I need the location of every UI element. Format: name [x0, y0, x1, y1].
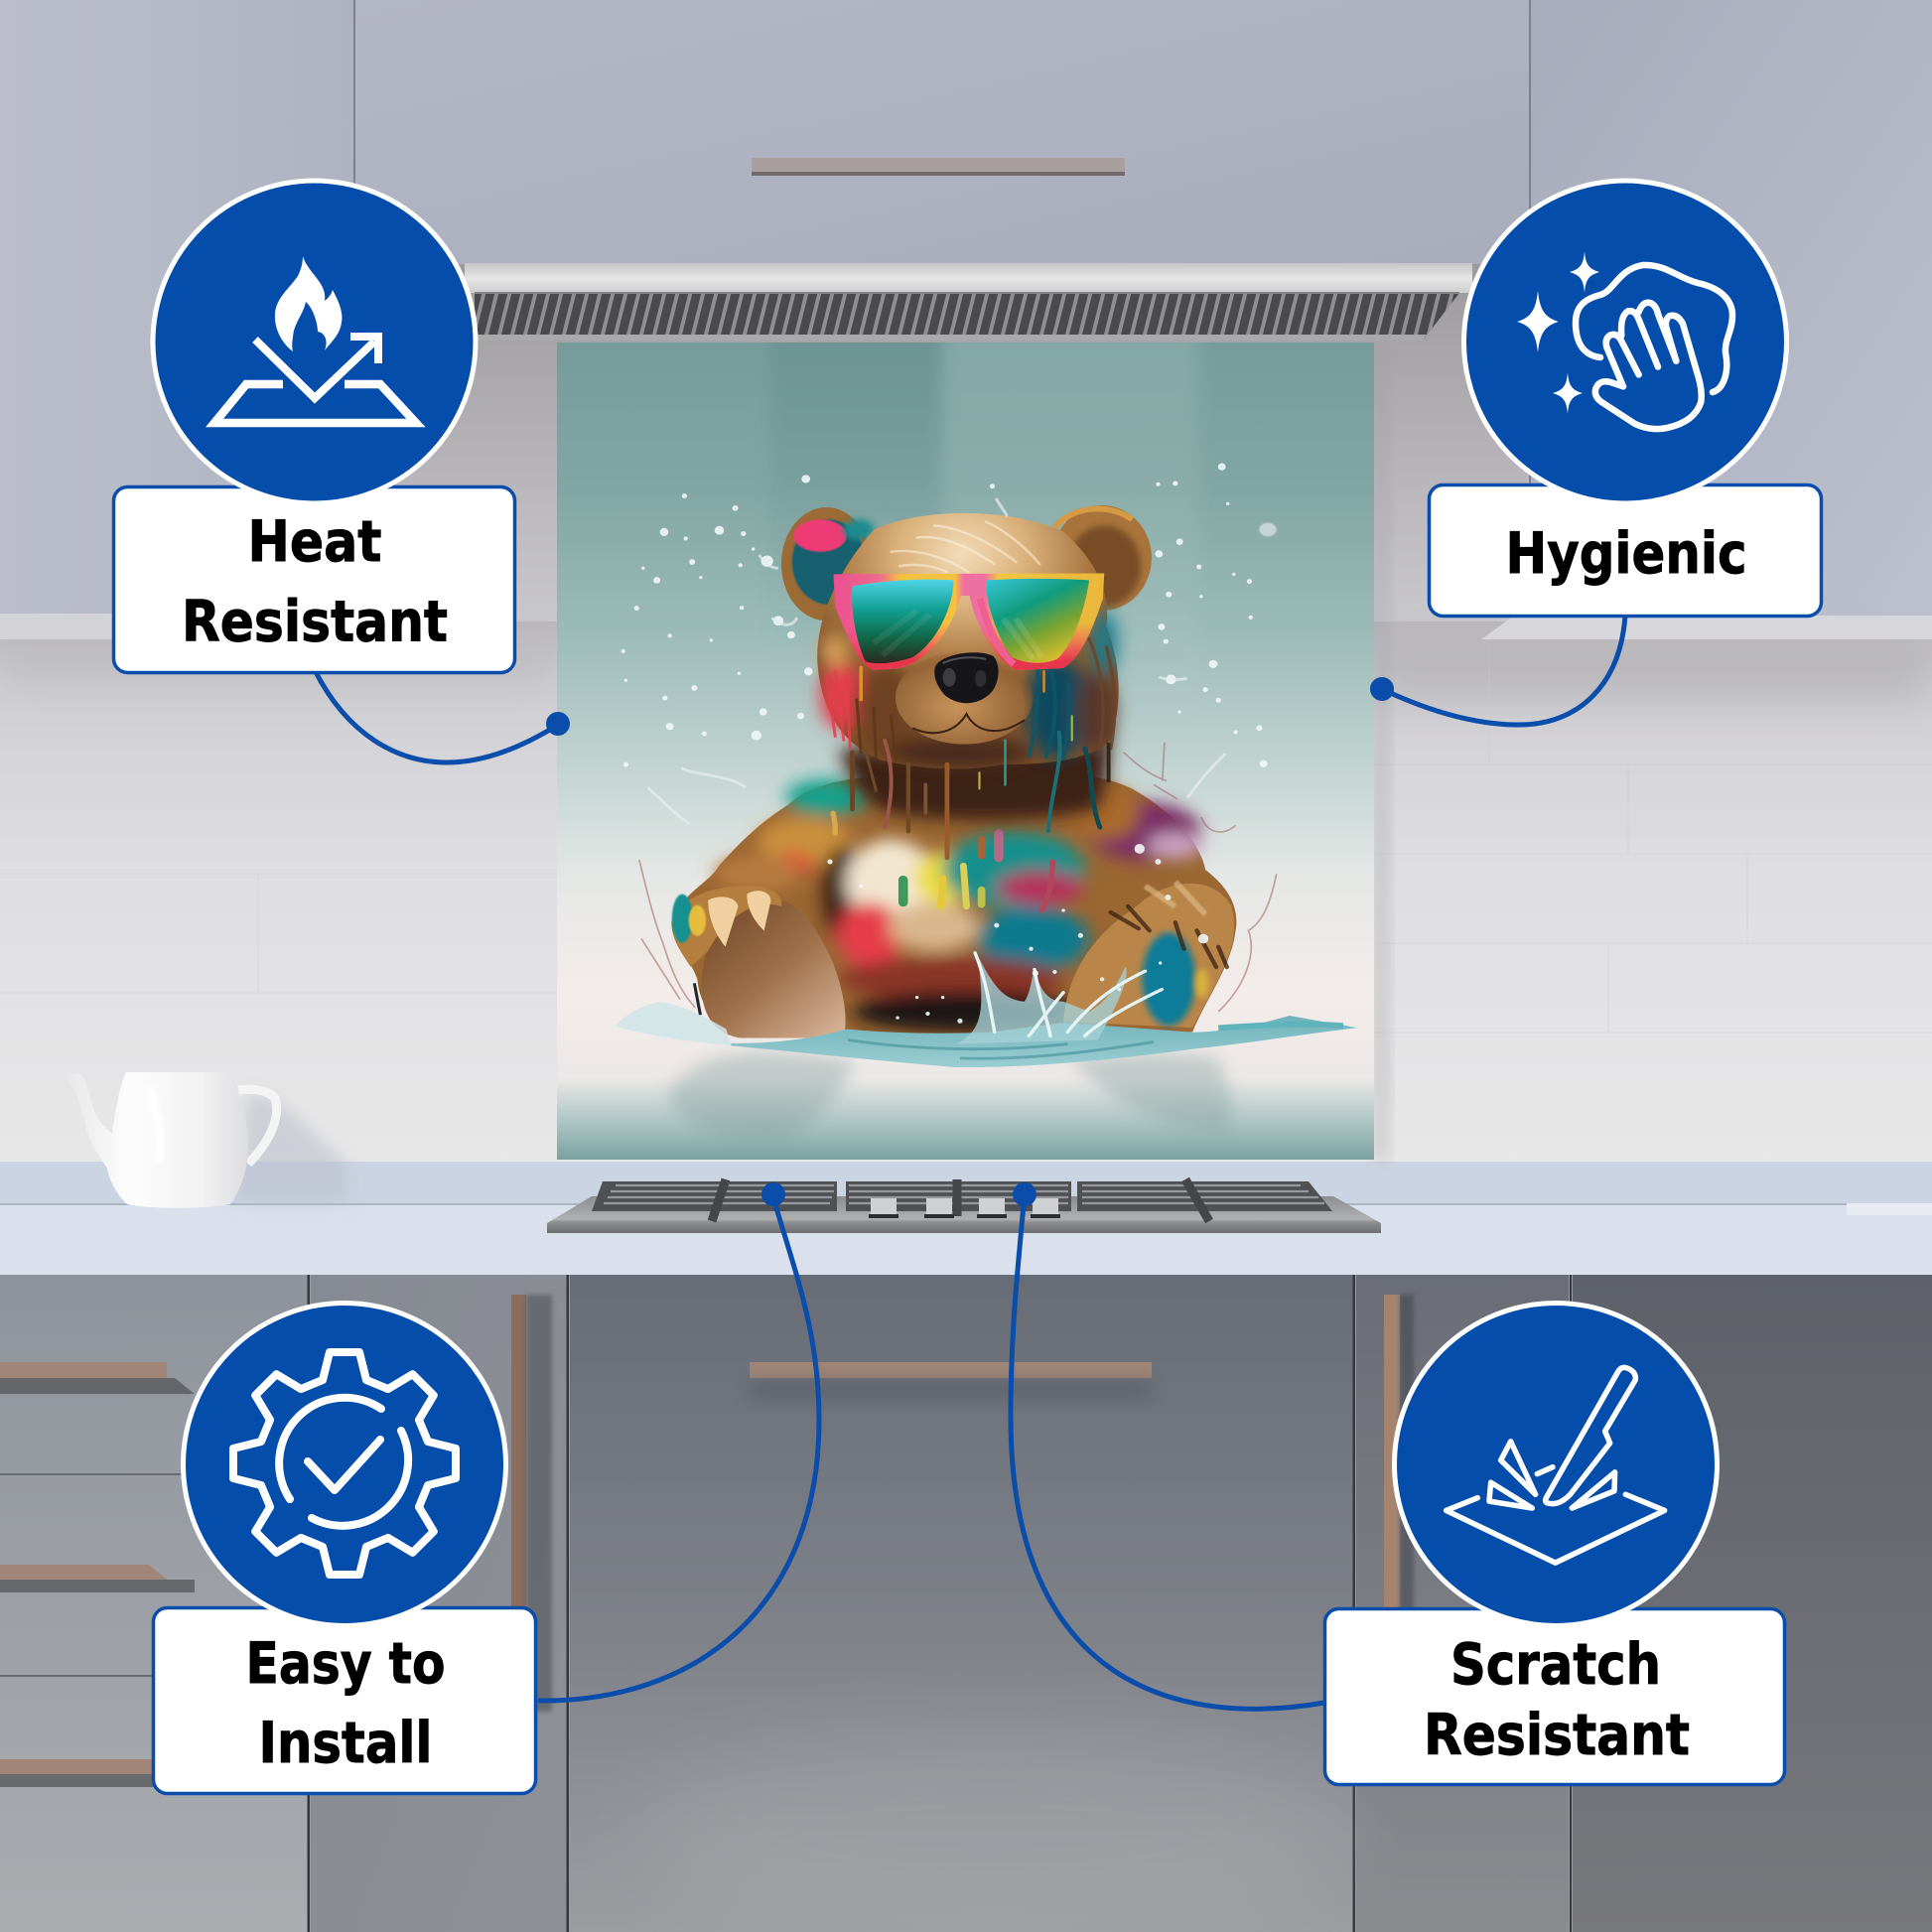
badge circle: [1463, 181, 1787, 503]
lower right door a: [1356, 1275, 1569, 1932]
hob: [547, 1179, 1381, 1233]
icon: hand wiping with sparkles: [1517, 251, 1732, 429]
water droplets: [621, 464, 1268, 1024]
vertical door handle right: [1384, 1295, 1400, 1712]
connector: hygienic: [1370, 616, 1625, 725]
heading: Hygienic: [1505, 521, 1747, 587]
right upper cabinet: [1529, 0, 1932, 616]
head: [817, 513, 1119, 769]
left leg: [702, 900, 846, 1037]
upper cabinet handle: [752, 158, 1125, 176]
left paw: [671, 886, 781, 1015]
left ear: [781, 507, 875, 621]
soft cabinet reflections: [635, 1727, 1350, 1932]
tile joints: [0, 645, 1932, 1033]
neck shadow: [840, 741, 1109, 820]
chest drips: [903, 833, 1052, 910]
icon: flame over surface with deflecting arrow: [214, 256, 416, 423]
teapot: [65, 1072, 347, 1208]
left lens: [852, 580, 953, 663]
connector: heat resistant: [315, 670, 570, 762]
bottom reflections: [668, 1052, 1231, 1139]
worktop: [0, 1203, 1932, 1275]
badge circle: [1394, 1303, 1718, 1626]
heading: Heat: [248, 509, 381, 575]
water pool: [616, 953, 1357, 1067]
left cabinet under-strip: [0, 614, 486, 639]
badge circle: [183, 1303, 506, 1626]
right ear: [1052, 505, 1152, 611]
panel soft bands: [776, 343, 1195, 506]
cabinet gaps: [309, 1275, 1571, 1932]
mouth: [912, 714, 1025, 733]
callout: heat resistant: [113, 181, 514, 673]
right cabinet under-strip: [1481, 616, 1932, 639]
paint drips: [833, 667, 1109, 858]
centre door handle: [750, 1362, 1152, 1378]
shadow under strips: [0, 639, 557, 689]
sunglasses: [833, 574, 1104, 670]
label box: [1324, 1608, 1785, 1785]
head colour patches: [820, 611, 1117, 768]
body colour patches: [715, 778, 1203, 1032]
callout: scratch resistant: [1324, 1303, 1785, 1785]
badge circle: [153, 181, 476, 503]
splash streaks: [649, 499, 1225, 823]
panel: bear glass splashback: [557, 323, 1388, 1160]
control knobs: [871, 1198, 1058, 1216]
wall behind hood: [353, 264, 1530, 621]
right lens: [986, 579, 1089, 663]
callout: hygienic: [1430, 181, 1821, 616]
nose: [934, 652, 999, 703]
vertical door handle left: [511, 1295, 526, 1700]
drawer handles: [0, 1362, 167, 1774]
connector: scratch resistant: [1011, 1182, 1324, 1709]
blurred drop: [1259, 523, 1277, 536]
heading line 2: Resistant: [1424, 1703, 1690, 1768]
lower left door: [311, 1275, 567, 1932]
panel shadow: [1374, 343, 1388, 1160]
extractor hood: [465, 263, 1472, 341]
centre upper cabinet: [353, 0, 1530, 264]
fur highlights: [892, 521, 1039, 572]
right arm: [1063, 884, 1234, 1028]
lower drawers: [0, 1275, 308, 1932]
bear body: [671, 773, 1236, 1037]
heading: Scratch: [1450, 1632, 1661, 1698]
label box: [1430, 484, 1821, 616]
heading: Easy to: [246, 1631, 445, 1697]
counter backsplash band: [0, 1162, 1932, 1205]
icon: knife scratching surface: [1447, 1367, 1665, 1563]
label box: [153, 1608, 536, 1793]
lower right door b: [1573, 1275, 1932, 1932]
lower centre door: [570, 1275, 1353, 1932]
muzzle: [896, 651, 1034, 745]
left upper cabinet: [0, 0, 354, 614]
heading line 2: Resistant: [182, 590, 448, 655]
red splash strands: [639, 743, 1277, 1012]
callout: easy to install: [153, 1303, 536, 1793]
icon: gear with check mark: [233, 1352, 456, 1575]
connector: easy to install: [538, 1182, 819, 1701]
upper cabinet gaps: [354, 0, 1530, 616]
panel background: [557, 343, 1374, 1160]
centre splash: [956, 955, 1127, 1044]
wall tiles: [0, 616, 1932, 1172]
heading line 2: Install: [258, 1711, 433, 1776]
fur strands: [827, 639, 1115, 760]
burner grates: [592, 1181, 1332, 1211]
label box: [113, 486, 514, 673]
bear illustration: [616, 464, 1357, 1067]
